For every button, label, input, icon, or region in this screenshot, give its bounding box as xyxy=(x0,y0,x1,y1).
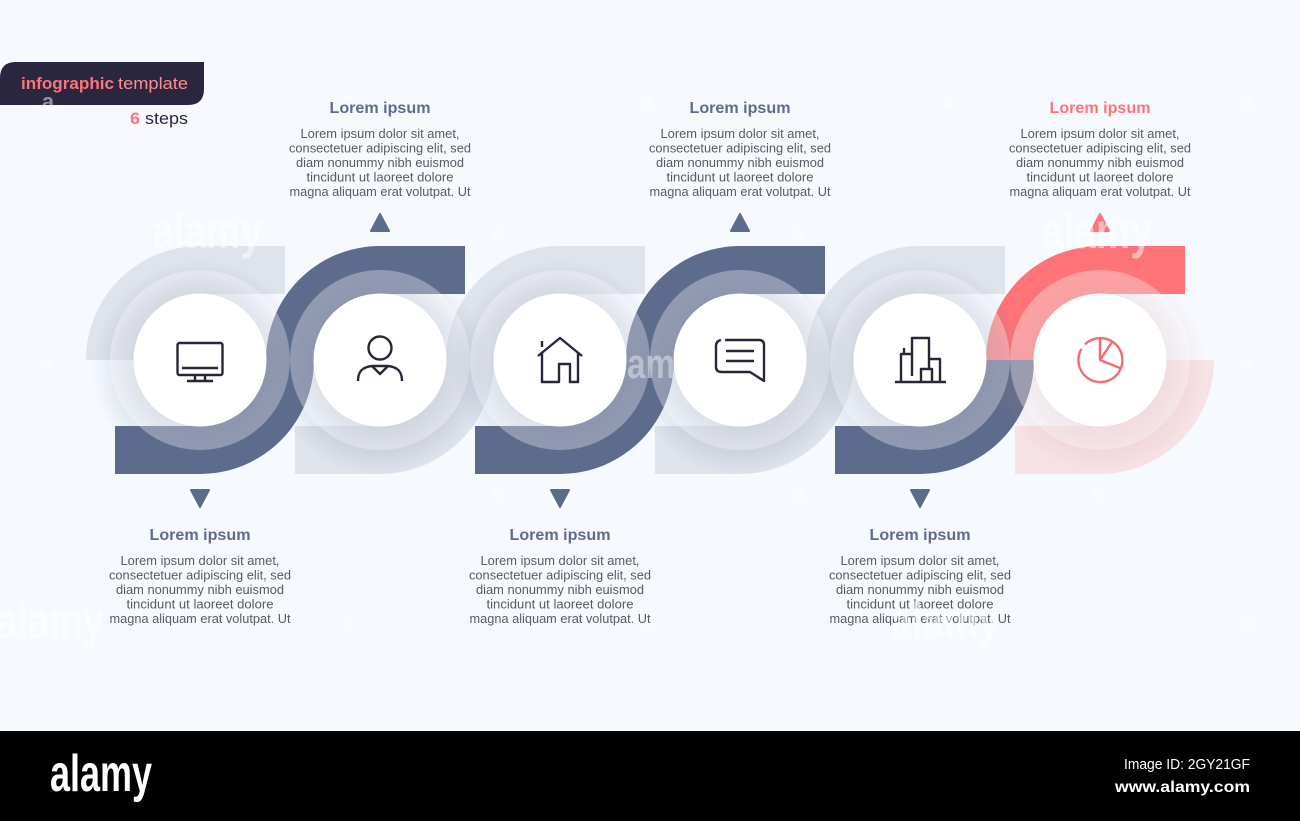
text block: step 6: Lorem ipsum dolor sit amet, xyxy=(1020,127,1180,141)
text block: step 6: Lorem ipsum xyxy=(1050,100,1150,117)
text block: step 3: magna aliquam erat volutpat. Ut xyxy=(470,612,651,626)
step 3 circle with house icon xyxy=(452,260,668,476)
text block: step 5: tincidunt ut laoreet dolore xyxy=(846,598,994,612)
header badge: infographic xyxy=(21,74,114,93)
small watermark marks: a xyxy=(642,610,655,635)
band: step 3 top xyxy=(446,246,645,360)
text block: step 3: diam nonummy nibh euismod xyxy=(476,583,644,597)
text block: step 2 xyxy=(289,100,471,199)
band: step 1 bottom xyxy=(115,360,314,474)
icon: pie chart xyxy=(1078,338,1122,382)
header badge xyxy=(0,62,204,114)
text block: step 1: diam nonummy nibh euismod xyxy=(116,583,284,597)
large watermarks: alamy xyxy=(0,593,104,649)
text block: step 3 xyxy=(469,527,651,626)
large watermarks: alamy xyxy=(152,203,262,259)
text block: step 2: consectetuer adipiscing elit, sed xyxy=(289,142,471,156)
arrow: step 2 up xyxy=(371,214,389,231)
small watermark marks: a xyxy=(1242,88,1255,113)
band: step 3 bottom xyxy=(475,360,674,474)
icon: house xyxy=(538,338,582,382)
step 1 circle with monitor icon xyxy=(92,260,308,476)
icon: speech bubble xyxy=(716,340,764,381)
text block: step 6 xyxy=(1009,100,1191,199)
small watermark marks: a xyxy=(1242,349,1255,374)
text block: step 4: consectetuer adipiscing elit, sed xyxy=(649,142,831,156)
text block: step 4: magna aliquam erat volutpat. Ut xyxy=(650,185,831,199)
text block: step 6: magna aliquam erat volutpat. Ut xyxy=(1010,185,1191,199)
text block: step 4: diam nonummy nibh euismod xyxy=(656,156,824,170)
subtitle: 6 steps: 6 steps xyxy=(130,109,188,128)
text block: step 1 xyxy=(109,527,291,626)
text block: step 1: consectetuer adipiscing elit, sed xyxy=(109,568,291,582)
large watermarks xyxy=(0,203,1152,649)
large watermarks: alamy xyxy=(890,593,1000,649)
text block: step 5: Lorem ipsum dolor sit amet, xyxy=(840,554,1000,568)
header badge: a xyxy=(42,89,55,114)
text block: step 2: magna aliquam erat volutpat. Ut xyxy=(290,185,471,199)
small watermark marks xyxy=(42,88,1255,635)
flowing ribbon bands xyxy=(86,246,1214,474)
text block: step 3: consectetuer adipiscing elit, sed xyxy=(469,568,651,582)
text block: step 5: consectetuer adipiscing elit, sed xyxy=(829,568,1011,582)
arrow: step 5 down xyxy=(911,490,929,507)
text block: step 1: magna aliquam erat volutpat. Ut xyxy=(110,612,291,626)
small watermark marks: a xyxy=(1242,610,1255,635)
band: step 2 bottom xyxy=(295,360,494,474)
text block: step 6: tincidunt ut laoreet dolore xyxy=(1026,170,1174,184)
arrow: step 1 down xyxy=(191,490,209,507)
arrow: step 4 up xyxy=(731,214,749,231)
footer bar xyxy=(0,731,1300,821)
small watermark marks: a xyxy=(942,349,955,374)
text block: step 1: tincidunt ut laoreet dolore xyxy=(126,598,274,612)
small watermark marks: a xyxy=(1092,480,1105,505)
band: step 4 bottom xyxy=(655,360,854,474)
text block: step 3: tincidunt ut laoreet dolore xyxy=(486,598,634,612)
band: step 1 top xyxy=(86,246,285,360)
text block: step 1: Lorem ipsum xyxy=(150,527,250,544)
text block: step 4: tincidunt ut laoreet dolore xyxy=(666,170,814,184)
text block: step 4: Lorem ipsum xyxy=(690,100,790,117)
text block: step 1: Lorem ipsum dolor sit amet, xyxy=(120,554,280,568)
band: step 5 bottom xyxy=(835,360,1034,474)
text block: step 3: Lorem ipsum xyxy=(510,527,610,544)
website: www.alamy.com xyxy=(1114,779,1250,796)
footer logo: alamy xyxy=(50,745,152,803)
band: step 4 top xyxy=(626,246,825,360)
step 5 circle with buildings icon xyxy=(812,260,1028,476)
text block: step 2: diam nonummy nibh euismod xyxy=(296,156,464,170)
text block: step 6: consectetuer adipiscing elit, sed xyxy=(1009,142,1191,156)
image id: Image ID: 2GY21GF xyxy=(1124,756,1250,773)
band: step 6 bottom xyxy=(1015,360,1214,474)
arrow: step 6 up xyxy=(1091,214,1109,231)
step 2 circle with person icon xyxy=(272,260,488,476)
text block: step 2: tincidunt ut laoreet dolore xyxy=(306,170,454,184)
small watermark marks: a xyxy=(792,480,805,505)
band: step 6 top xyxy=(986,246,1185,360)
text block: step 5: Lorem ipsum xyxy=(870,527,970,544)
small watermark marks: a xyxy=(792,220,805,245)
step 4 circle with chat icon xyxy=(632,260,848,476)
text block: step 5 xyxy=(829,527,1011,626)
text block: step 4: Lorem ipsum dolor sit amet, xyxy=(660,127,820,141)
small watermark marks: a xyxy=(42,349,55,374)
small watermark marks: a xyxy=(642,88,655,113)
small watermark marks: a xyxy=(342,88,355,113)
band: step 5 top xyxy=(806,246,1005,360)
text block: step 4 xyxy=(649,100,831,199)
text block: step 6: diam nonummy nibh euismod xyxy=(1016,156,1184,170)
small watermark marks: a xyxy=(492,480,505,505)
text block: step 2: Lorem ipsum xyxy=(330,100,430,117)
band: step 2 top xyxy=(266,246,465,360)
text block: step 5: diam nonummy nibh euismod xyxy=(836,583,1004,597)
small watermark marks: a xyxy=(492,220,505,245)
icon: monitor xyxy=(178,343,222,381)
header badge: template xyxy=(118,74,188,93)
text block: step 2: Lorem ipsum dolor sit amet, xyxy=(300,127,460,141)
small watermark marks: a xyxy=(942,88,955,113)
icon: person xyxy=(358,336,402,381)
text block: step 3: Lorem ipsum dolor sit amet, xyxy=(480,554,640,568)
small watermark marks: a xyxy=(342,610,355,635)
step 6 circle with pie chart icon xyxy=(992,260,1208,476)
large watermarks: alamy xyxy=(1042,203,1152,259)
watermark fragment over ribbon: am xyxy=(627,340,675,387)
arrow: step 3 down xyxy=(551,490,569,507)
icon: buildings xyxy=(895,338,946,382)
text block: step 5: magna aliquam erat volutpat. Ut xyxy=(830,612,1011,626)
